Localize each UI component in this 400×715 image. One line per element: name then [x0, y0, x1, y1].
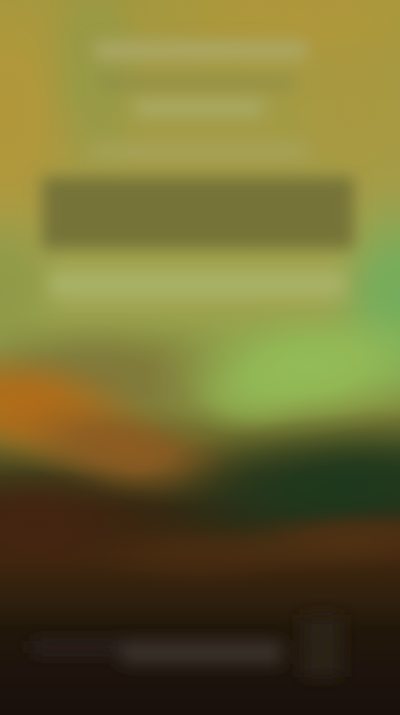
caption text below panel — [50, 272, 345, 296]
panel: central data block — [42, 177, 354, 249]
footer: brighter text segment — [122, 642, 282, 664]
subtitle — [92, 146, 306, 156]
heading: first title line — [95, 42, 307, 59]
footer: icon or logo — [302, 615, 342, 677]
band under title — [100, 78, 295, 88]
heading: second title line — [135, 100, 263, 116]
footer: main text — [32, 640, 282, 654]
